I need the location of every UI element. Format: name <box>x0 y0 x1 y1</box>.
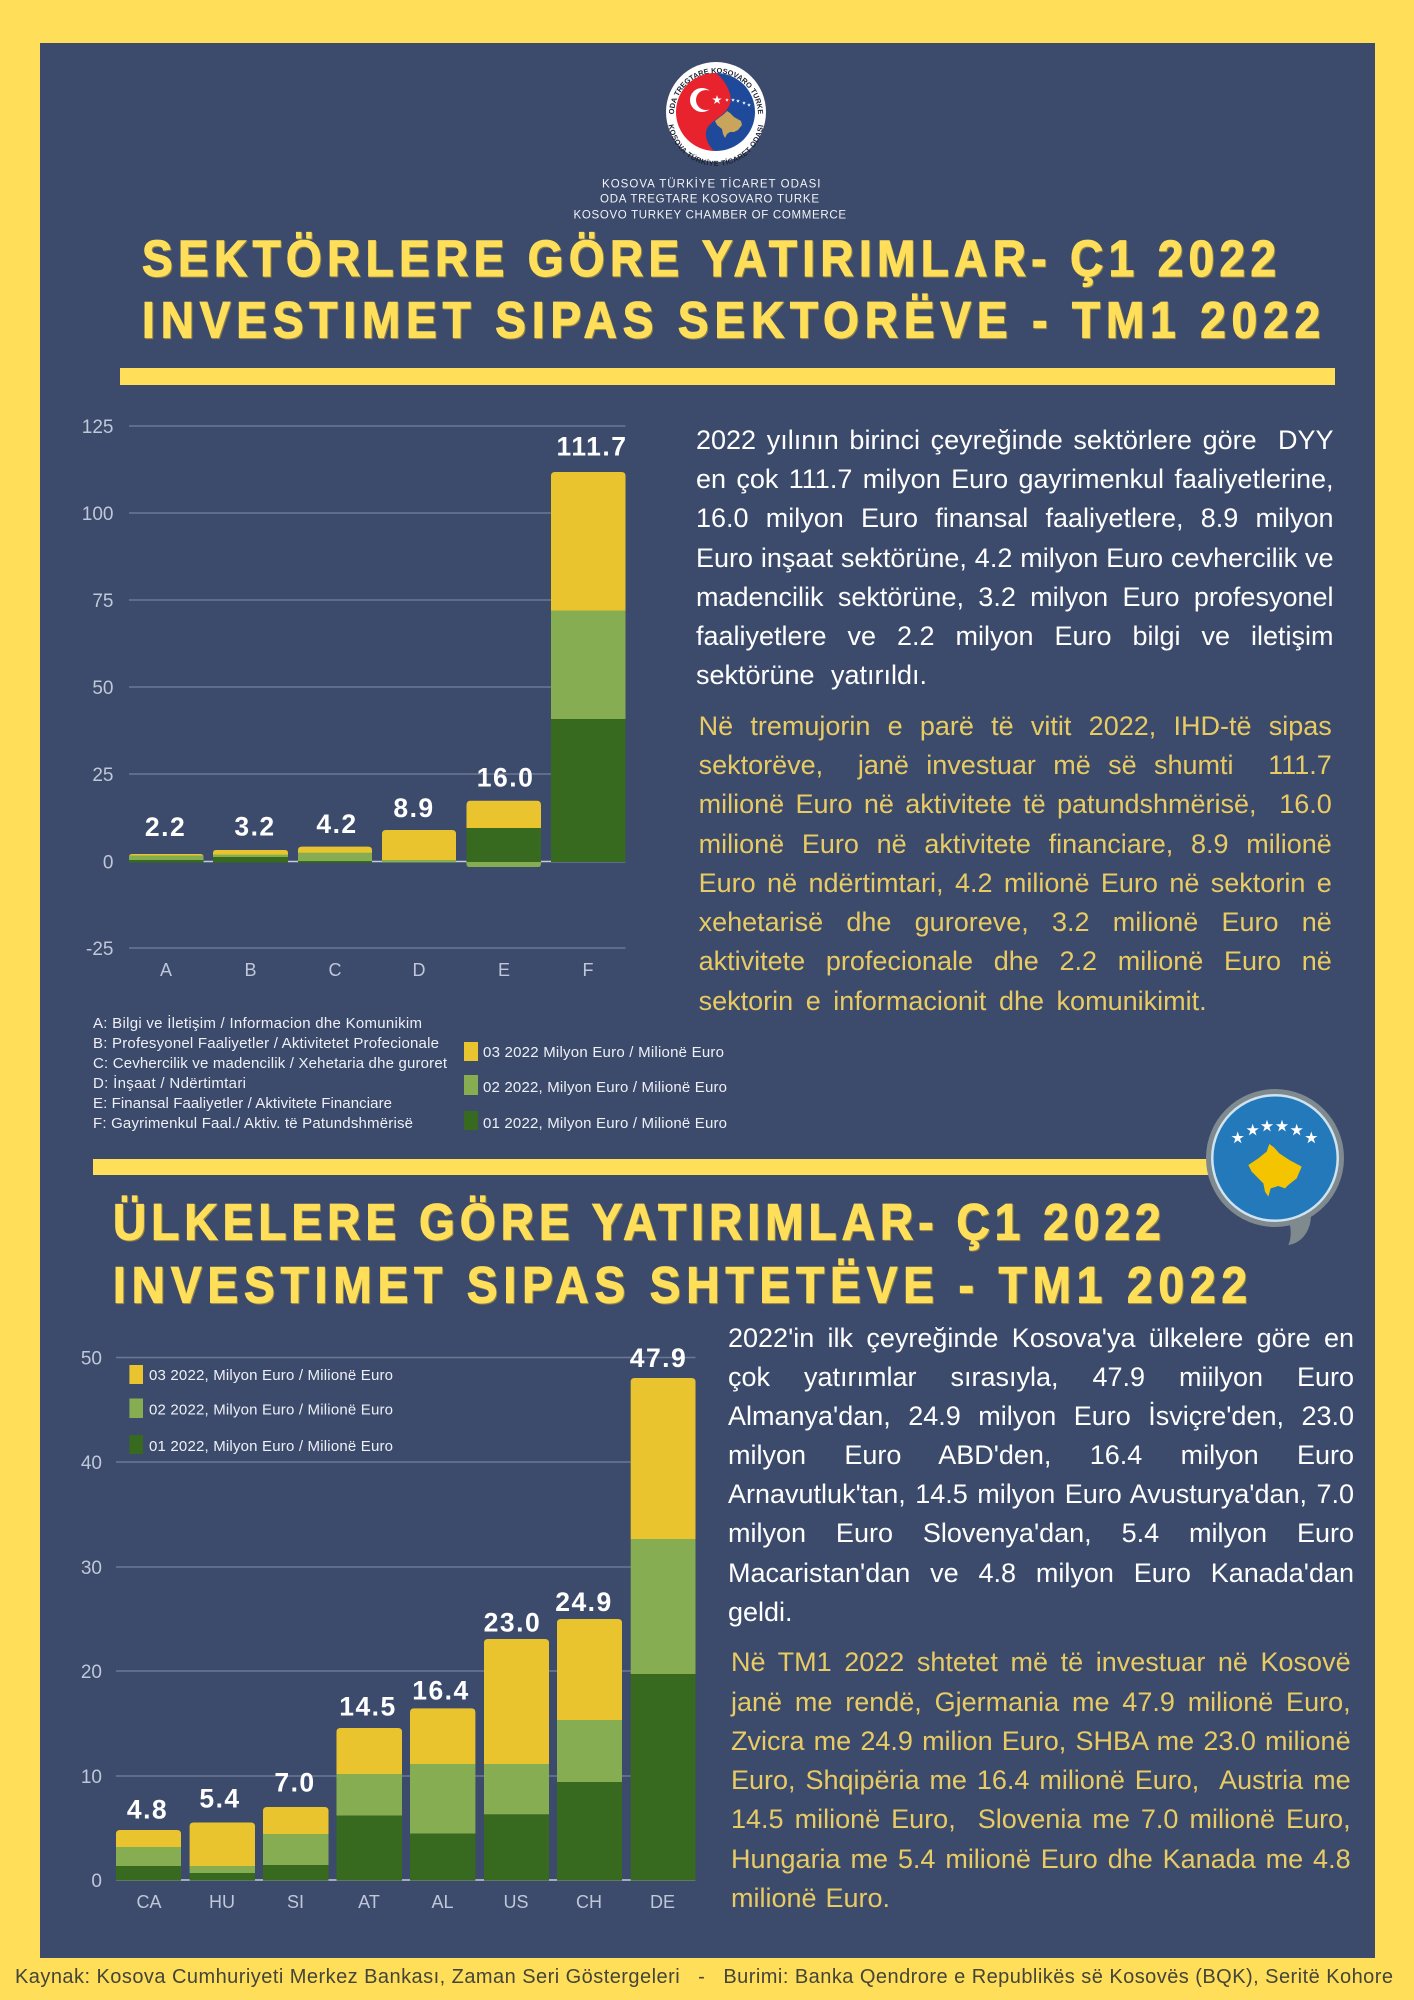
logo: Kosovo Turkey Chamber of Commerce: ODA TREGTARE KOSOVARO TURKE <box>668 68 764 114</box>
text block: sector summary in Turkish: madencilik sektörüne, 3.2 milyon Euro profesyonel <box>696 582 1334 612</box>
bar A: A <box>160 960 172 980</box>
bar F: F <box>582 960 594 980</box>
category key: sectors A to F: F: Gayrimenkul Faal./ Aktiv. të Patundshmërisë <box>93 1115 413 1132</box>
bar HU: HU <box>209 1892 235 1912</box>
y axis grid and labels: 20 <box>81 1662 102 1683</box>
title: investments by sector <box>142 231 1320 349</box>
title: investments by country <box>113 1194 1247 1314</box>
y axis grid and labels: 30 <box>81 1558 102 1579</box>
bar D: D <box>412 960 426 980</box>
divider bar: lower section <box>93 1159 1218 1175</box>
text block: country summary in Albanian: janë me rendë, Gjermania me 47.9 milionë Euro, <box>731 1687 1351 1717</box>
legend: sector chart quarters: 03 2022 Milyon Euro / Milionë Euro <box>483 1044 724 1061</box>
text block: sector summary in Turkish <box>696 425 1334 690</box>
text block: country summary in Turkish: milyon Euro ABD'den, 16.4 milyon Euro <box>728 1440 1354 1470</box>
bar C: C <box>328 960 342 980</box>
bar chart: investments by country <box>81 1343 696 1912</box>
y axis grid and labels <box>81 1348 696 1892</box>
text block: sector summary in Albanian: milionë Euro në aktivitete të patundshmërisë, 16.0 <box>699 789 1332 819</box>
text block: country summary in Turkish <box>728 1323 1354 1627</box>
text block: country summary in Turkish: geldi. <box>728 1597 793 1627</box>
bar AL: 16.4 <box>412 1676 470 1706</box>
y axis grid and labels: 0 <box>103 852 114 874</box>
bar A: 2.2 <box>145 812 186 842</box>
bar DE <box>630 1343 696 1912</box>
text block: country summary in Albanian: Hungaria me 5.4 milionë Euro dhe Kanada me 4.8 <box>731 1844 1351 1874</box>
bar E <box>466 762 541 980</box>
bar D: 8.9 <box>393 793 435 823</box>
bar A <box>129 812 204 980</box>
bar AT: AT <box>358 1892 380 1912</box>
bar US <box>484 1608 549 1912</box>
organisation names <box>574 178 846 222</box>
text block: country summary in Albanian: 14.5 milionë Euro, Slovenia me 7.0 milionë Euro, <box>731 1804 1351 1834</box>
text block: sector summary in Albanian: sektorin e informacionit dhe komunikimit. <box>699 986 1207 1016</box>
text block: sector summary in Albanian: Në tremujorin e parë të vitit 2022, IHD-të sipas <box>699 711 1332 741</box>
y axis grid and labels: 40 <box>81 1453 102 1474</box>
bar C <box>298 809 372 980</box>
y axis grid and labels: 25 <box>92 765 114 786</box>
y axis grid and labels: 0 <box>91 1871 102 1892</box>
organisation names: KOSOVA TÜRKİYE TİCARET ODASI <box>602 178 820 190</box>
bar CA <box>116 1795 181 1912</box>
bar B <box>213 812 288 980</box>
legend: sector chart quarters: 01 2022, Milyon Euro / Milionë Euro <box>483 1115 727 1132</box>
bar B: B <box>244 960 257 980</box>
bar CH: 24.9 <box>555 1587 613 1617</box>
legend: country chart quarters: 02 2022, Milyon Euro / Milionë Euro <box>149 1402 393 1418</box>
bar AL: AL <box>431 1892 454 1912</box>
category key: sectors A to F: C: Cevhercilik ve madencilik / Xehetaria dhe guroret <box>93 1055 448 1072</box>
bar SI: SI <box>287 1892 304 1912</box>
bar AL <box>410 1676 475 1912</box>
bar SI: 7.0 <box>274 1768 316 1798</box>
organisation names: ODA TREGTARE KOSOVARO TURKE <box>600 194 819 206</box>
text block: sector summary in Turkish: 2022 yılının birinci çeyreğinde sektörlere göre DYY <box>696 425 1334 455</box>
text block: sector summary in Turkish: 16.0 milyon Euro finansal faaliyetlere, 8.9 milyon <box>696 503 1334 533</box>
bar CA: 4.8 <box>127 1795 168 1825</box>
category key: sectors A to F: D: İnşaat / Ndërtimtari <box>93 1074 246 1092</box>
title: investments by sector: SEKTÖRLERE GÖRE YATIRIMLAR- Ç1 2022 <box>142 231 1276 288</box>
bar AT: 14.5 <box>339 1692 397 1722</box>
icon: Kosovo flag speech badge <box>1206 1089 1344 1245</box>
source footer: Kaynak: Kosova Cumhuriyeti Merkez Bankası, Zaman Seri Göstergeleri - Burimi: Banka Qendrore e Republikës së Kosovës (BQK), Seritë Kohore <box>15 1966 1393 1988</box>
y axis grid and labels: 50 <box>81 1348 102 1370</box>
legend: sector chart quarters <box>464 1042 727 1132</box>
bar US: 23.0 <box>484 1608 541 1638</box>
bar D <box>382 793 456 980</box>
y axis grid and labels: 125 <box>82 417 114 438</box>
text block: country summary in Albanian <box>730 1647 1351 1913</box>
logo: Kosovo Turkey Chamber of Commerce <box>666 62 766 166</box>
bar DE: DE <box>650 1892 675 1912</box>
text block: country summary in Turkish: Almanya'dan, 24.9 milyon Euro İsviçre'den, 23.0 <box>728 1401 1354 1431</box>
text block: country summary in Albanian: Në TM1 2022 shtetet më të investuar në Kosovë <box>731 1647 1351 1677</box>
y axis grid and labels <box>82 417 626 960</box>
bar F: 111.7 <box>557 432 627 462</box>
text block: sector summary in Albanian <box>699 711 1332 1016</box>
title: investments by country: ÜLKELERE GÖRE YATIRIMLAR- Ç1 2022 <box>113 1194 1161 1251</box>
text block: sector summary in Turkish: Euro inşaat sektörüne, 4.2 milyon Euro cevhercilik ve <box>696 543 1334 573</box>
organisation names: KOSOVO TURKEY CHAMBER OF COMMERCE <box>574 210 846 222</box>
bar HU: 5.4 <box>199 1784 241 1814</box>
y axis grid and labels: 10 <box>81 1767 102 1788</box>
text block: sector summary in Albanian: milionë Euro në aktivitete financiare, 8.9 milionë <box>699 829 1332 859</box>
legend: country chart quarters <box>129 1365 393 1455</box>
y axis grid and labels: 50 <box>92 678 114 699</box>
text block: country summary in Albanian: Zvicra me 24.9 milion Euro, SHBA me 23.0 milionë <box>731 1726 1351 1756</box>
bar CH: CH <box>576 1892 602 1912</box>
text block: sector summary in Albanian: aktivitete profecionale dhe 2.2 milionë Euro në <box>699 946 1332 976</box>
bar SI <box>263 1768 328 1912</box>
bar US: US <box>503 1892 529 1912</box>
text block: sector summary in Turkish: sektörüne yatırıldı. <box>696 660 927 690</box>
category key: sectors A to F <box>93 1014 448 1132</box>
text block: sector summary in Albanian: Euro në ndërtimtari, 4.2 milionë Euro në sektorin e <box>699 868 1332 898</box>
text block: country summary in Turkish: 2022'in ilk çeyreğinde Kosova'ya ülkelere göre en <box>728 1323 1354 1353</box>
bar CH <box>555 1587 622 1912</box>
text block: country summary in Turkish: Arnavutluk'tan, 14.5 milyon Euro Avusturya'dan, 7.0 <box>728 1479 1354 1509</box>
bar CA: CA <box>136 1892 162 1912</box>
bar C: 4.2 <box>316 809 358 839</box>
bar B: 3.2 <box>234 812 276 842</box>
text block: sector summary in Turkish: faaliyetlere ve 2.2 milyon Euro bilgi ve iletişim <box>696 621 1334 651</box>
text block: country summary in Turkish: çok yatırımlar sırasıyla, 47.9 miilyon Euro <box>728 1362 1354 1392</box>
category key: sectors A to F: B: Profesyonel Faaliyetler / Aktivitetet Profecionale <box>93 1035 439 1052</box>
bar DE: 47.9 <box>630 1343 687 1373</box>
bar chart: investments by sector <box>82 417 627 980</box>
category key: sectors A to F: A: Bilgi ve İletişim / Informacion dhe Komunikim <box>93 1014 422 1032</box>
text block: country summary in Turkish: Macaristan'dan ve 4.8 milyon Euro Kanada'dan <box>728 1558 1354 1588</box>
text block: sector summary in Turkish: en çok 111.7 milyon Euro gayrimenkul faaliyetlerine, <box>696 464 1334 494</box>
bar AT <box>336 1692 402 1912</box>
logo: Kosovo Turkey Chamber of Commerce: KOSOVA TÜRKİYE TİCARET ODASI <box>668 124 764 166</box>
y axis grid and labels: -25 <box>86 939 114 960</box>
bar E: 16.0 <box>477 762 534 792</box>
y axis grid and labels: 75 <box>92 591 114 612</box>
text block: country summary in Turkish: milyon Euro Slovenya'dan, 5.4 milyon Euro <box>728 1518 1354 1548</box>
text block: sector summary in Albanian: sektorëve, janë investuar më së shumti 111.7 <box>699 750 1332 780</box>
legend: country chart quarters: 01 2022, Milyon Euro / Milionë Euro <box>149 1438 393 1455</box>
bar HU <box>190 1784 255 1912</box>
title: investments by country: INVESTIMET SIPAS SHTETËVE - TM1 2022 <box>113 1257 1247 1314</box>
bar F <box>551 432 627 980</box>
category key: sectors A to F: E: Finansal Faaliyetler / Aktivitete Financiare <box>93 1095 392 1112</box>
title: investments by sector: INVESTIMET SIPAS SEKTORËVE - TM1 2022 <box>142 292 1320 349</box>
y axis grid and labels: 100 <box>82 504 114 525</box>
legend: country chart quarters: 03 2022, Milyon Euro / Milionë Euro <box>149 1367 393 1384</box>
divider bar: top section <box>120 368 1335 385</box>
bar E: E <box>498 960 510 980</box>
text block: sector summary in Albanian: xehetarisë dhe guroreve, 3.2 milionë Euro në <box>699 907 1332 937</box>
text block: country summary in Albanian: Euro, Shqipëria me 16.4 milionë Euro, Austria me <box>731 1765 1351 1795</box>
legend: sector chart quarters: 02 2022, Milyon Euro / Milionë Euro <box>483 1079 727 1096</box>
text block: country summary in Albanian: milionë Euro. <box>731 1883 890 1913</box>
